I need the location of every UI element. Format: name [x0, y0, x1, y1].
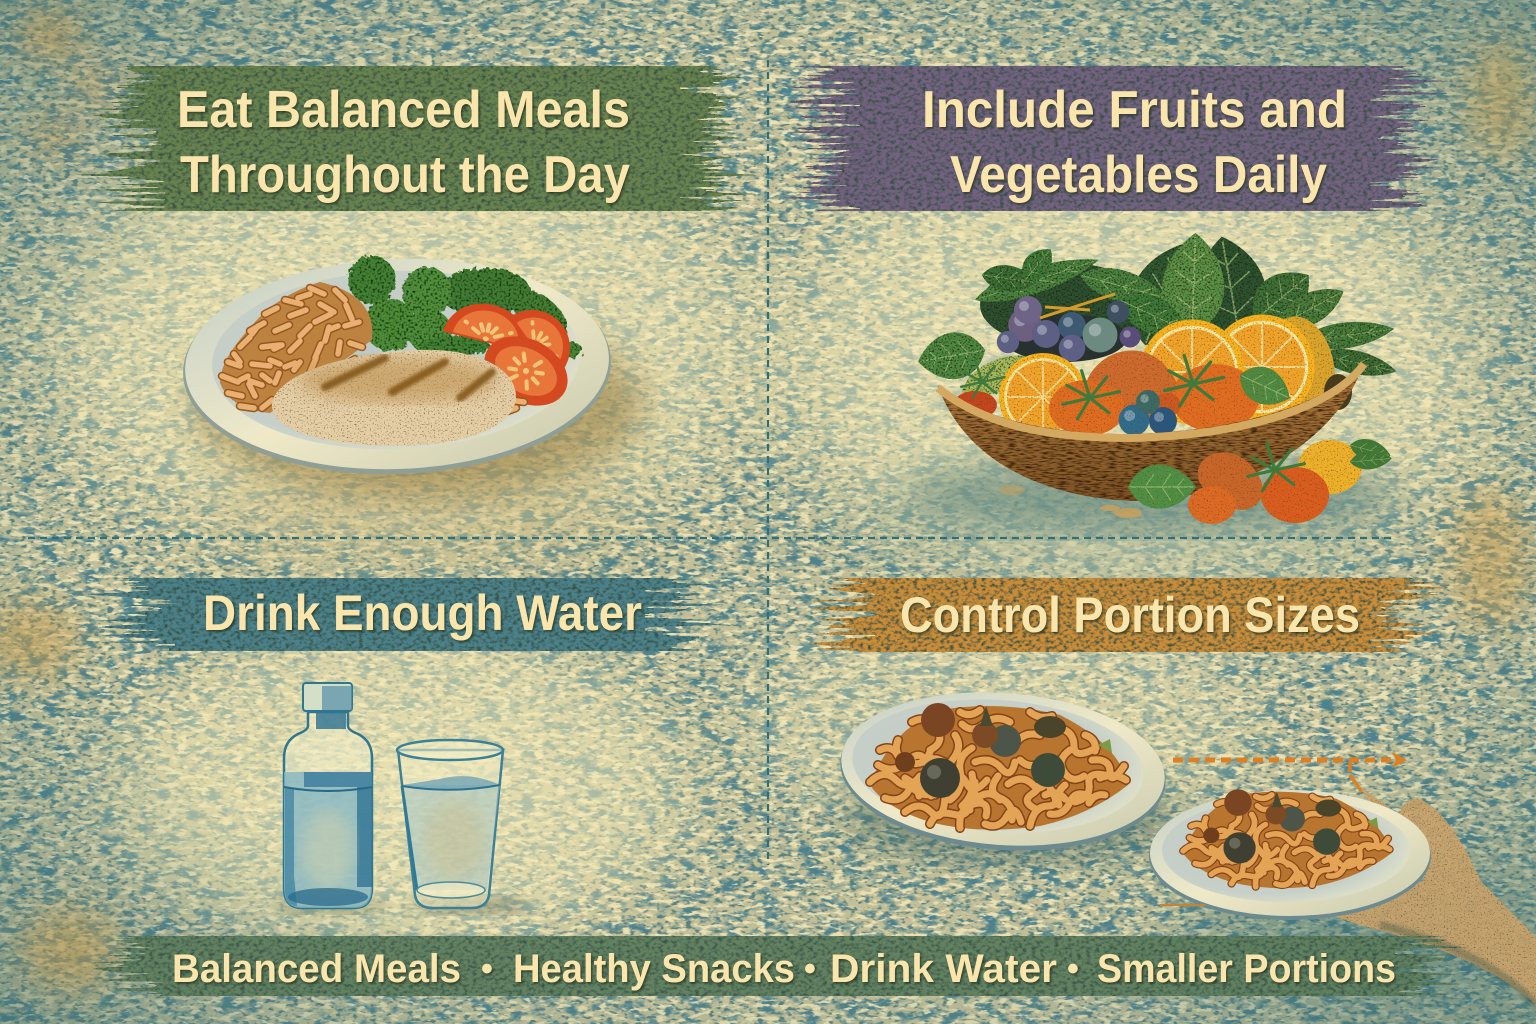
broccoli and greens — [348, 256, 582, 358]
illustration: water bottle — [275, 683, 385, 913]
heading: eat balanced meals: Throughout the Day — [180, 146, 630, 204]
heading: control portion sizes: Control Portion Sizes — [900, 587, 1360, 643]
plate — [179, 252, 615, 481]
heading: include fruits and vegetables: Include Fruits and — [922, 81, 1347, 139]
footer banner — [130, 936, 1430, 996]
footer summary text: Drink Water — [830, 947, 1057, 991]
rice — [220, 282, 524, 414]
illustration: plate with rice, chicken, broccoli and tomato — [179, 252, 645, 495]
divider: vertical dashed line — [767, 60, 769, 865]
illustration: hand holding plate — [1330, 785, 1536, 1005]
fruit in front of bowl — [1128, 435, 1393, 524]
heading: include fruits and vegetables — [922, 81, 1347, 204]
heading: drink enough water: Drink Enough Water — [203, 585, 642, 641]
seeds on table — [999, 485, 1142, 518]
water in glass — [402, 785, 500, 890]
footer summary text: Healthy Snacks — [513, 947, 795, 991]
water in bottle — [284, 772, 372, 908]
illustration: glass of water — [397, 740, 530, 914]
bottle cap — [303, 683, 352, 711]
grilled chicken — [272, 350, 516, 446]
panel: fruits and vegetables — [825, 66, 1405, 533]
blueberries and grapes — [997, 296, 1140, 362]
panel: drink enough water — [140, 578, 680, 914]
footer summary text: Smaller Portions — [1097, 947, 1396, 991]
banner: teal — [140, 578, 680, 651]
heading: eat balanced meals: Eat Balanced Meals — [177, 81, 630, 139]
footer summary text — [172, 947, 1396, 991]
illustration: small pasta plate — [1149, 789, 1431, 920]
banner: green — [130, 66, 715, 211]
wooden bowl — [938, 362, 1364, 501]
orange slices and tomatoes — [953, 311, 1352, 441]
panel: eat balanced meals — [130, 66, 715, 495]
banner: orange — [840, 578, 1405, 652]
footer summary text: • — [481, 950, 493, 988]
heading: eat balanced meals — [177, 81, 630, 204]
tomato slices — [443, 295, 585, 419]
bottle neck shade — [316, 713, 346, 729]
arrow: dashed orange reduction arrow — [1173, 752, 1407, 792]
orange stem — [1040, 294, 1115, 318]
banner: footer strip — [130, 936, 1430, 996]
leafy greens — [914, 231, 1399, 406]
footer summary text: • — [1067, 950, 1079, 988]
illustration: large pasta plate — [835, 682, 1175, 863]
panel: control portion sizes — [835, 578, 1536, 1005]
divider: horizontal dashed line — [28, 537, 1395, 539]
illustration: bowl of fruit and greens — [900, 231, 1400, 533]
footer summary text: Balanced Meals — [172, 947, 461, 991]
banner: purple — [825, 66, 1405, 211]
heading: include fruits and vegetables: Vegetables Daily — [950, 146, 1327, 204]
footer summary text: • — [804, 950, 816, 988]
